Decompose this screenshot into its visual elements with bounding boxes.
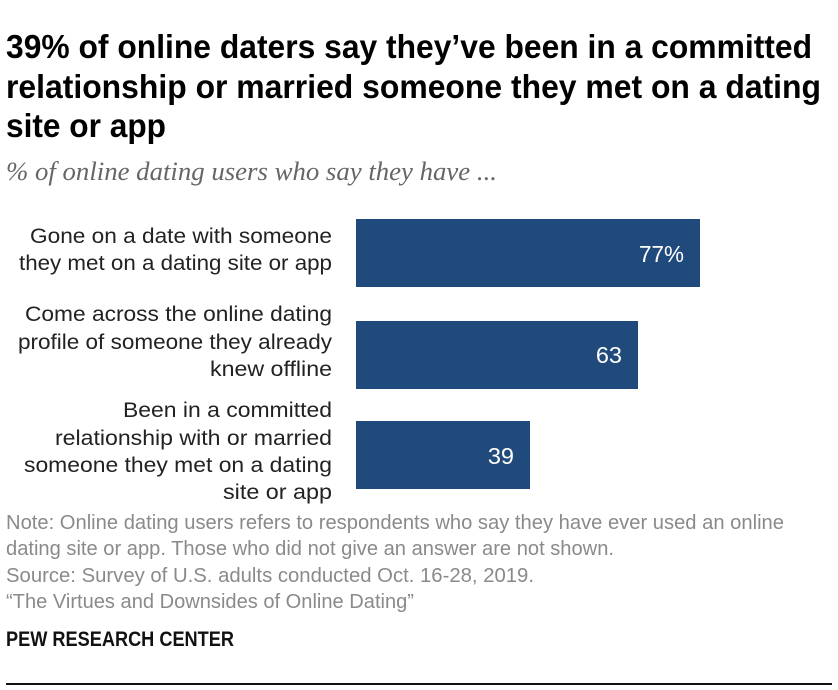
label: come across profile: Come across the online dating [25,302,332,326]
note and source: “The Virtues and Downsides of Online Dating” [6,590,414,613]
bar: 63 [356,321,638,389]
title: relationship or married someone they met on a dating [6,68,821,105]
bar: 77% [356,219,700,287]
label: committed relationship: relationship with or married [55,426,332,450]
label: come across profile: profile of someone they already [18,330,332,354]
note and source: Note: Online dating users refers to respondents who say they have ever used an online [6,511,784,534]
title: 39% of online daters say they’ve been in a committed [6,28,812,65]
note and source: Source: Survey of U.S. adults conducted Oct. 16-28, 2019. [6,564,534,587]
title: site or app [6,107,166,144]
label: committed relationship: someone they met on a dating [24,453,332,477]
credit: PEW RESEARCH CENTER [6,628,234,651]
bar chart [18,219,700,504]
bar: 39: 39 [488,443,514,469]
bottom rule [6,683,832,685]
label: gone on a date: Gone on a date with someone [30,224,332,248]
label: committed relationship: Been in a committed [123,398,332,422]
bar: 63: 63 [596,342,622,368]
label: gone on a date: they met on a dating site or app [19,251,332,275]
note and source [6,511,784,613]
bar: 77%: 77% [639,241,684,267]
label: come across profile [18,302,332,381]
label: committed relationship [24,398,332,504]
bar: 39 [356,421,530,489]
label: gone on a date [19,224,332,275]
title [6,28,821,144]
label: committed relationship: site or app [223,480,332,504]
note and source: dating site or app. Those who did not give an answer are not shown. [6,537,614,560]
label: come across profile: knew offline [210,357,332,381]
subtitle: % of online dating users who say they have ... [6,157,497,186]
